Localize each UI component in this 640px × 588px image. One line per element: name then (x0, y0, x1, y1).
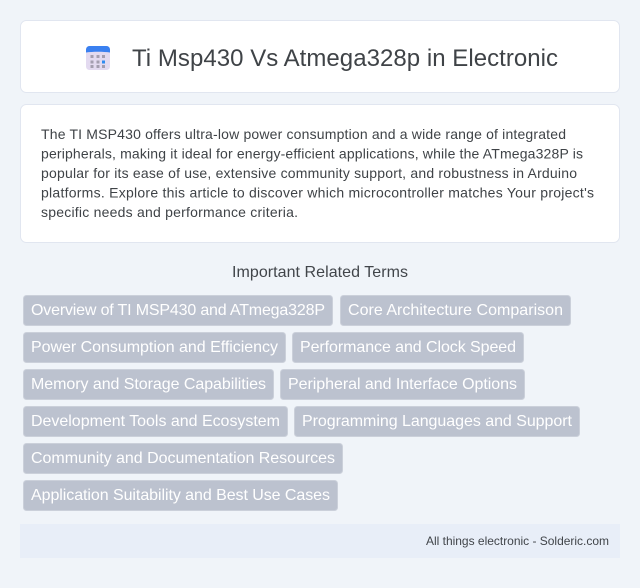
panel: header (20, 20, 620, 92)
tag: power: Power Consumption and Efficiency (31, 339, 278, 356)
tag: peripheral: Peripheral and Interface Options (288, 376, 517, 393)
tag: application (24, 480, 338, 510)
intro paragraph: popular for its ease of use, extensive community support, and robustness in Arduino (41, 165, 577, 181)
tag: power (24, 332, 286, 362)
panel: intro text (20, 104, 620, 242)
intro paragraph: specific needs and performance criteria. (41, 204, 298, 220)
tag: community (24, 444, 342, 474)
tag: development tools: Development Tools and Ecosystem (31, 413, 280, 430)
tag: core architecture (340, 296, 570, 326)
footer credit: All things electronic - Solderic.com (426, 534, 609, 548)
tag: core architecture: Core Architecture Comparison (348, 302, 563, 319)
title: Ti Msp430 Vs Atmega328p in Electronic (132, 45, 558, 72)
intro paragraph: platforms. Explore this article to discover which microcontroller matches Your project's (41, 184, 594, 200)
tag: programming languages: Programming Languages and Support (302, 413, 573, 430)
tag: performance: Performance and Clock Speed (300, 339, 516, 356)
tag: memory: Memory and Storage Capabilities (31, 376, 266, 393)
tag: overview: Overview of TI MSP430 and ATmega328P (31, 302, 325, 319)
tag: memory (24, 370, 274, 400)
tag: peripheral (280, 370, 524, 400)
tag: overview (24, 296, 332, 326)
tag list (24, 296, 580, 510)
intro paragraph: peripherals, making it ideal for energy-efficient applications, while the ATmega328P is (41, 146, 583, 162)
tag: performance (292, 332, 524, 362)
intro paragraph (41, 126, 594, 220)
footer bar (20, 524, 620, 558)
tag: community: Community and Documentation Resources (31, 450, 335, 467)
tag: development tools (24, 406, 288, 436)
intro paragraph: The TI MSP430 offers ultra-low power consumption and a wide range of integrated (41, 126, 566, 142)
icon: calendar grid (86, 46, 110, 70)
heading: related terms: Important Related Terms (232, 264, 408, 281)
tag: programming languages (294, 406, 580, 436)
tag: application: Application Suitability and Best Use Cases (31, 487, 330, 504)
